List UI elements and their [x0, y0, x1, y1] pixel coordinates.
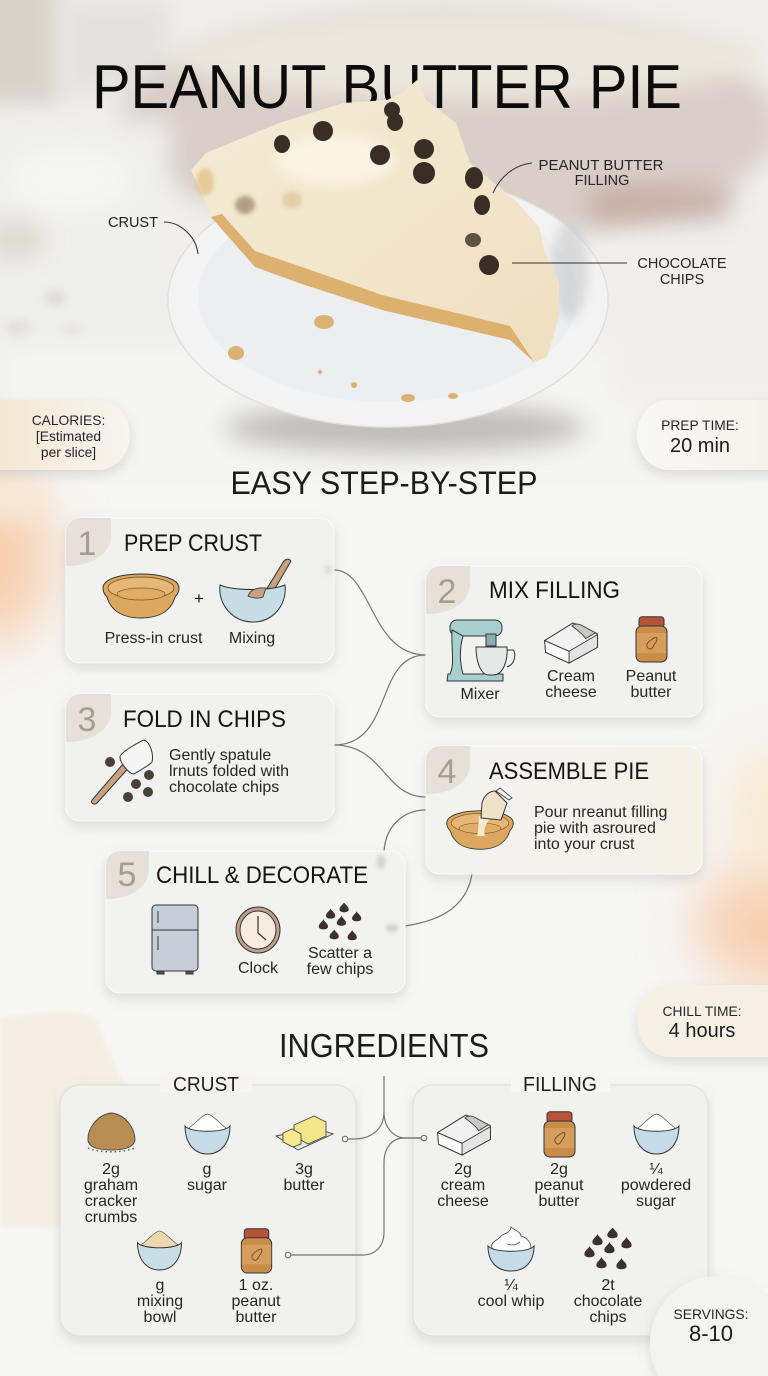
- label: chocolate chips: [574, 1277, 642, 1326]
- label: butter: butter: [284, 1177, 325, 1194]
- step number 4: 4: [438, 753, 456, 791]
- step heading: PREP CRUST: [124, 530, 262, 557]
- pill: chill time: CHILL TIME:: [663, 1004, 741, 1019]
- step 1: prep crust: [66, 518, 334, 663]
- icon: chocolate chips: [319, 902, 361, 940]
- crust: [211, 214, 534, 362]
- plus: +: [194, 589, 204, 608]
- step text: pie with asroured: [534, 820, 656, 837]
- callout: crust: CRUST: [108, 215, 158, 231]
- icon: pouring filling into crust: [447, 788, 513, 849]
- label: peanut butter: butter: [631, 684, 672, 701]
- icon: cream cheese: [545, 623, 597, 663]
- plate: [168, 173, 608, 427]
- label: cool whip: ¼: [504, 1277, 518, 1294]
- badge: servings: [650, 1276, 768, 1376]
- label: clock: Clock: [238, 960, 279, 977]
- step number 5: 5: [118, 856, 136, 894]
- pill: prep time: PREP TIME:: [661, 418, 739, 433]
- label: powdered sugar: powdered: [621, 1177, 691, 1194]
- step number 4: [426, 746, 470, 794]
- callout: peanut butter filling: PEANUT BUTTER: [538, 158, 664, 174]
- badge: servings: 8-10: [689, 1321, 733, 1346]
- label: peanut butter: [626, 668, 677, 701]
- label: peanut butter: Peanut: [626, 668, 677, 685]
- icon: sugar bowl: [185, 1114, 230, 1154]
- step number 3: [66, 694, 111, 742]
- label: sugar: [187, 1161, 228, 1194]
- callout: peanut butter filling: FILLING: [575, 173, 629, 189]
- label: graham cracker crumbs: [84, 1161, 138, 1226]
- label: scatter a few chips: Scatter a: [308, 945, 372, 962]
- label: cream cheese: cheese: [437, 1193, 489, 1210]
- step number 2: [426, 566, 470, 614]
- icon: butter: [276, 1116, 333, 1150]
- connectors: ingredient lines: [285, 1076, 427, 1258]
- label: cream cheese: Cream: [547, 668, 595, 685]
- step 3: fold in chips: [66, 694, 334, 821]
- step text: [534, 804, 667, 853]
- label: graham cracker crumbs: crumbs: [85, 1209, 137, 1226]
- label: peanut butter: [232, 1277, 281, 1326]
- pill: prep time: [637, 400, 768, 470]
- label: butter: 3g: [295, 1161, 313, 1178]
- step number 2: 2: [438, 573, 456, 611]
- icon: clock: [236, 907, 280, 953]
- label: cool whip: cool whip: [478, 1293, 544, 1310]
- callout: crust: [108, 215, 198, 254]
- step heading: ASSEMBLE PIE: [489, 758, 649, 785]
- label: mixing bowl: bowl: [144, 1309, 176, 1326]
- filling: [191, 80, 559, 362]
- label: chocolate chips: chips: [589, 1309, 627, 1326]
- pill: calories: [Estimated: [36, 429, 101, 444]
- step 5: chill & decorate: [106, 851, 405, 993]
- icon: chocolate chips: [584, 1227, 632, 1269]
- plate shadow: [225, 404, 585, 452]
- label: cool whip: [478, 1277, 544, 1310]
- label: powdered sugar: sugar: [636, 1193, 677, 1210]
- step text: lrnuts folded with: [169, 763, 289, 780]
- icon: spatula and chips: [92, 740, 154, 804]
- panel heading: filling: FILLING: [523, 1074, 597, 1096]
- step 2: mix filling: [426, 566, 702, 717]
- label: mixing: Mixing: [229, 630, 275, 647]
- label: cream cheese: cheese: [545, 684, 597, 701]
- step text: chocolate chips: [169, 779, 279, 796]
- callout: peanut butter filling: [493, 158, 664, 193]
- step text: [169, 747, 289, 796]
- label: peanut butter: peanut: [232, 1293, 281, 1310]
- pill: prep time: 20 min: [670, 435, 730, 457]
- label: scatter a few chips: [307, 945, 373, 978]
- step number 1: 1: [78, 525, 96, 563]
- step heading: MIX FILLING: [489, 577, 620, 604]
- label: peanut butter: butter: [236, 1309, 277, 1326]
- callout: chocolate chips: [512, 256, 727, 288]
- label: graham cracker crumbs: 2g: [102, 1161, 120, 1178]
- label: sugar: sugar: [187, 1177, 228, 1194]
- callout: chocolate chips: CHOCOLATE: [637, 256, 727, 272]
- label: cream cheese: [437, 1161, 489, 1210]
- connectors between steps: [334, 570, 472, 926]
- step text: Pour nreanut filling: [534, 804, 667, 821]
- step heading: FOLD IN CHIPS: [123, 706, 286, 733]
- icon: stand mixer: [447, 620, 515, 681]
- step 4: assemble pie: [426, 746, 702, 874]
- label: scatter a few chips: few chips: [307, 961, 373, 978]
- label: peanut butter: butter: [539, 1193, 580, 1210]
- label: peanut butter: peanut: [535, 1177, 584, 1194]
- icon: mixing bowl with spoon: [220, 559, 291, 622]
- label: peanut butter: [535, 1161, 584, 1210]
- label: mixer: Mixer: [460, 686, 500, 703]
- pill: calories: per slice]: [41, 445, 96, 460]
- panel: crust ingredients: [60, 1074, 356, 1336]
- icon: press-in crust: [103, 574, 179, 618]
- label: cream cheese: 2g: [454, 1161, 472, 1178]
- step number 5: [106, 851, 149, 899]
- label: sugar: g: [203, 1161, 211, 1178]
- label: mixing bowl: [137, 1277, 183, 1326]
- chocolate chips: [274, 102, 499, 275]
- step number 1: [66, 518, 111, 566]
- step heading: CHILL & DECORATE: [156, 862, 368, 889]
- badge: servings: SERVINGS:: [674, 1307, 748, 1322]
- icon: peanut butter jar: [636, 617, 667, 662]
- label: press-in crust: Press-in crust: [105, 630, 203, 647]
- hero image: pie slice on plate: [168, 80, 608, 452]
- label: chocolate chips: 2t: [601, 1277, 615, 1294]
- pill: calories: [0, 400, 130, 470]
- icon: cream cheese: [438, 1115, 490, 1155]
- heading: ingredients: INGREDIENTS: [279, 1027, 489, 1064]
- heading: easy step-by-step: EASY STEP-BY-STEP: [230, 465, 538, 501]
- step text: into your crust: [534, 836, 635, 853]
- label: cream cheese: cream: [441, 1177, 485, 1194]
- icon: graham crumbs: [88, 1113, 135, 1152]
- step number 3: 3: [78, 701, 96, 739]
- icon: powdered sugar bowl: [634, 1114, 679, 1154]
- icon: mixing bowl: [138, 1231, 181, 1270]
- panel: filling ingredients: [413, 1074, 708, 1336]
- crumbs: [228, 315, 458, 402]
- label: chocolate chips: chocolate: [574, 1293, 642, 1310]
- label: mixing bowl: g: [156, 1277, 164, 1294]
- label: powdered sugar: ¼: [649, 1161, 663, 1178]
- icon: peanut butter jar: [241, 1229, 272, 1273]
- icon: cool whip bowl: [488, 1227, 534, 1271]
- pill: calories: CALORIES:: [32, 413, 105, 428]
- icon: fridge: [152, 905, 198, 974]
- label: graham cracker crumbs: graham: [84, 1177, 138, 1194]
- label: butter: [284, 1161, 325, 1194]
- label: graham cracker crumbs: cracker: [85, 1193, 138, 1210]
- pill: chill time: [637, 985, 768, 1057]
- step text: Gently spatule: [169, 747, 271, 764]
- label: peanut butter: 1 oz.: [239, 1277, 273, 1294]
- panel heading: crust: CRUST: [173, 1074, 239, 1096]
- label: cream cheese: [545, 668, 597, 701]
- pill: chill time: 4 hours: [669, 1020, 735, 1042]
- label: peanut butter: 2g: [550, 1161, 568, 1178]
- callout: chocolate chips: CHIPS: [660, 272, 704, 288]
- icon: peanut butter jar: [544, 1112, 575, 1157]
- label: mixing bowl: mixing: [137, 1293, 183, 1310]
- label: powdered sugar: [621, 1161, 691, 1210]
- title: PEANUT BUTTER PIE: [92, 53, 682, 122]
